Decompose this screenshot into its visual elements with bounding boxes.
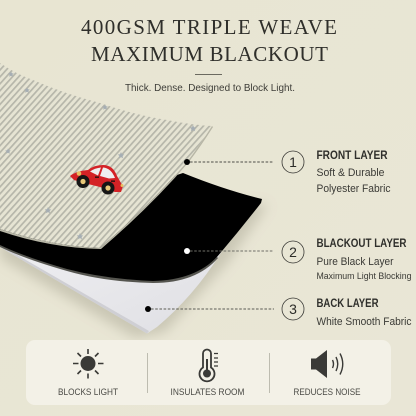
label: back layer: BACK LAYER: [316, 296, 379, 310]
number badge 2: 2: [289, 244, 297, 260]
label: blocks light: BLOCKS LIGHT: [58, 387, 118, 397]
label: front layer: Soft & Durable: [316, 167, 384, 179]
label: blackout layer: Pure Black Layer: [316, 256, 394, 268]
number badge 1: 1: [289, 154, 297, 170]
title: 400GSM TRIPLE WEAVE: [81, 15, 337, 39]
title: [81, 15, 337, 66]
label: front layer: [316, 148, 391, 195]
number badge 1: [282, 151, 304, 173]
label: back layer: [316, 296, 412, 328]
panel: benefits: [26, 340, 391, 405]
leader line: front layer: [184, 159, 274, 165]
label: reduces noise: REDUCES NOISE: [294, 387, 360, 397]
layered fabric illustration: [0, 63, 268, 338]
title divider: [195, 74, 222, 75]
leader line: blackout layer: [184, 248, 274, 254]
number badge 3: [282, 298, 304, 320]
icon: red car: [70, 165, 124, 194]
drop shadow: [0, 200, 268, 338]
icon: sun: [73, 349, 104, 378]
star print dots: [5, 72, 196, 239]
front layer: striped fabric: [0, 63, 213, 249]
label: front layer: FRONT LAYER: [316, 148, 388, 162]
label: front layer: Polyester Fabric: [316, 183, 391, 195]
shadow under front layer: [0, 160, 192, 250]
back layer: white fabric: [0, 232, 222, 334]
leader line: back layer: [145, 306, 274, 312]
label: blackout layer: [316, 236, 412, 282]
number badge 3: 3: [289, 301, 297, 317]
subtitle: Thick. Dense. Designed to Block Light.: [125, 83, 295, 94]
icon: thermometer: [200, 350, 218, 381]
icon: speaker: [311, 350, 343, 378]
label: insulates room: INSULATES ROOM: [170, 387, 244, 397]
title: MAXIMUM BLACKOUT: [91, 42, 328, 66]
blackout layer: [0, 173, 262, 283]
number badge 2: [282, 241, 304, 263]
